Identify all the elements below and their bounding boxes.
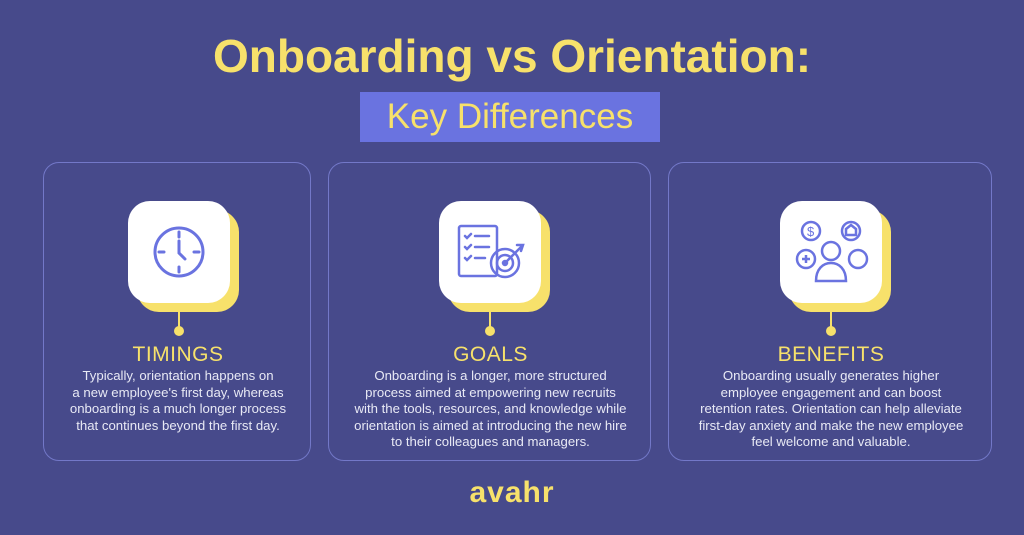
text: that continues beyond the first day. <box>76 418 280 432</box>
heading: BENEFITS <box>778 343 884 366</box>
heading: GOALS <box>453 343 528 366</box>
icon: clock <box>128 201 230 303</box>
text <box>698 368 963 449</box>
icon: person benefits: $ <box>807 224 815 239</box>
subtitle box <box>360 92 660 142</box>
icon: checklist target <box>439 201 541 303</box>
text: Onboarding usually generates higher <box>723 368 939 383</box>
text: feel welcome and valuable. <box>751 434 911 449</box>
text: a new employee's first day, whereas <box>72 384 284 400</box>
text: to their colleagues and managers. <box>391 434 590 449</box>
title: Onboarding vs Orientation: <box>213 30 811 82</box>
panel: goals <box>328 162 651 461</box>
icon: person benefits <box>780 201 882 303</box>
text: orientation is aimed at introducing the new hire <box>354 418 627 432</box>
text: first-day anxiety and make the new employee <box>699 418 963 432</box>
text: process aimed at empowering new recruits <box>365 384 616 400</box>
logo: avahr <box>469 476 555 509</box>
text: with the tools, resources, and knowledge while <box>355 401 626 416</box>
panel: timings <box>43 162 311 461</box>
heading: TIMINGS <box>132 343 224 366</box>
panel: benefits <box>668 162 992 461</box>
connector <box>178 304 180 328</box>
subtitle box: Key Differences <box>387 97 633 136</box>
text <box>354 368 627 449</box>
text: retention rates. Orientation can help alleviate <box>700 401 962 416</box>
text: onboarding is a much longer process <box>70 401 286 416</box>
text: Typically, orientation happens on <box>82 368 274 383</box>
text: Onboarding is a longer, more structured <box>374 368 607 383</box>
text <box>70 368 286 432</box>
text: employee engagement and can boost <box>721 384 941 400</box>
